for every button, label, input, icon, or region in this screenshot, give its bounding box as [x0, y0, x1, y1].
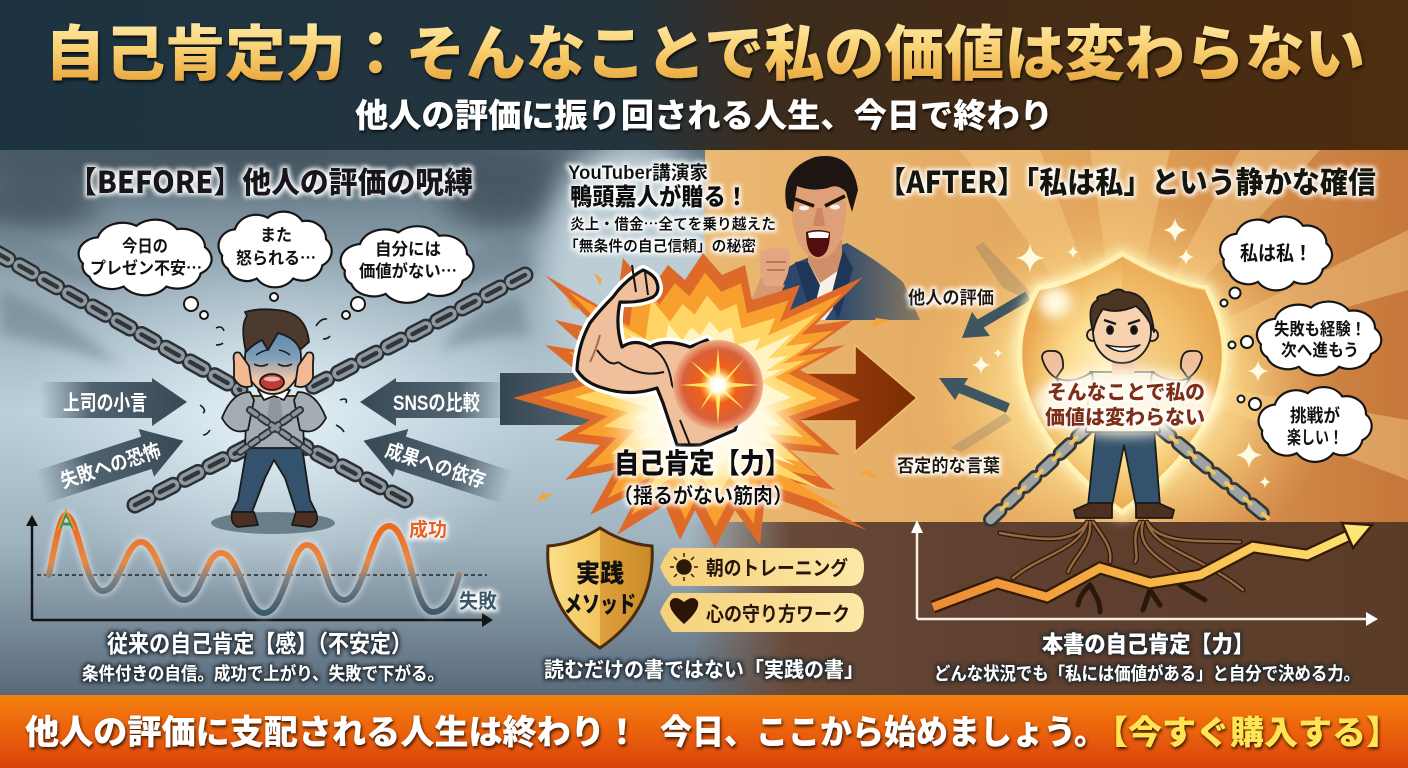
icon: flexed muscular arm — [577, 265, 745, 445]
explosion burst — [513, 253, 890, 548]
chains: broken after — [990, 428, 1268, 520]
arrow: boss's nagging — [40, 378, 187, 426]
thought bubble: presentation anxiety: プレゼン不安… — [90, 254, 202, 279]
label: others' evaluation: 他人の評価 — [908, 284, 994, 310]
thought bubble: challenge is fun: 挑戦が — [1290, 402, 1340, 428]
author caption — [564, 162, 776, 256]
thought bubble: scolded again — [219, 212, 332, 301]
panel: before background — [0, 132, 800, 695]
chart: unstable self-esteem wave — [26, 510, 493, 627]
icon: glowing core — [673, 340, 763, 430]
thought bubble: no worth: 価値がない… — [359, 257, 457, 282]
heading: after: 【AFTER】「私は私」という静かな確信 — [878, 158, 1376, 202]
pill: heart protection work — [660, 593, 864, 632]
thought bubble: no worth: 自分には — [375, 235, 441, 260]
roots — [1000, 522, 1243, 612]
header band — [0, 0, 1408, 150]
heading: this book's self-affirmation power: 本書の自己肯定【力】 — [1042, 625, 1254, 659]
arrow: others' evaluation deflected — [962, 242, 1030, 338]
shield motto — [1033, 368, 1217, 436]
caption: book of practice: 読むだけの書ではない「実践の書」 — [544, 654, 864, 684]
shield motto: 価値は変わらない — [1045, 401, 1205, 430]
author portrait — [738, 156, 920, 320]
shield motto: そんなことで私の — [1047, 376, 1205, 405]
thought bubble: challenge is fun: 楽しい！ — [1287, 424, 1343, 450]
footer call to action — [0, 695, 1408, 768]
label: success: 成功 — [409, 515, 447, 542]
pill: morning training: 朝のトレーニング — [706, 552, 848, 581]
heading: before: 【BEFORE】他人の評価の呪縛 — [68, 158, 473, 202]
icon: heart — [670, 598, 698, 624]
sparkles — [971, 218, 1271, 488]
thought bubble: presentation anxiety: 今日の — [122, 232, 168, 257]
heading: conventional self-esteem: 従来の自己肯定【感】（不安定） — [107, 624, 412, 659]
thought bubble: I am me: 私は私！ — [1240, 237, 1312, 266]
author caption: 「無条件の自己信頼」の秘密 — [564, 235, 756, 256]
pill: heart protection work: 心の守り方ワーク — [706, 598, 850, 627]
glowing shield — [1014, 248, 1230, 520]
badge: practical method shield: メソッド — [564, 585, 636, 619]
thought bubble: failure is experience: 次へ進もう — [1281, 336, 1359, 361]
badge: practical method shield — [548, 528, 652, 648]
arrow: before to after — [500, 345, 917, 452]
arrow: fear of failure: 失敗への恐怖 — [56, 434, 164, 494]
thought bubble: failure is experience — [1228, 302, 1381, 375]
pill: morning training — [660, 548, 864, 586]
arrow: boss's nagging: 上司の小言 — [63, 387, 147, 417]
footer call to action: 他人の評価に支配される人生は終わり！ — [25, 705, 639, 754]
arrow: dependence on results — [356, 417, 516, 511]
thought bubble: failure is experience: 失敗も経験！ — [1274, 315, 1366, 340]
heading: self-affirmation power: 自己肯定【力】 — [614, 442, 790, 482]
subtitle: 他人の評価に振り回される人生、今日で終わり — [355, 89, 1053, 137]
badge: practical method shield: 実践 — [576, 554, 624, 590]
caption: this book's self-affirmation power: どんな状況でも「私には価値がある」と自分で決める力。 — [934, 660, 1360, 686]
buy now button text: 【今すぐ購入する】 — [1094, 706, 1400, 754]
thought bubble: challenge is fun — [1238, 387, 1372, 462]
thought bubble: I am me — [1220, 217, 1332, 306]
label: failure: 失敗 — [459, 585, 497, 614]
chains: before — [0, 252, 525, 505]
title: 自己肯定力：そんなことで私の価値は変わらない — [45, 6, 1365, 93]
figure: confident man — [1042, 289, 1202, 518]
author caption: 炎上・借金…全てを乗り越えた — [570, 213, 776, 234]
arrow: SNS comparison — [360, 378, 510, 426]
author caption: 鴨頭嘉人が贈る！ — [570, 177, 748, 212]
arrow: dependence on results: 成果への依存 — [382, 434, 490, 494]
thought bubble: scolded again: また — [260, 221, 292, 246]
chart: rising self-affirmation — [911, 520, 1378, 626]
caption: conventional self-esteem: 条件付きの自信。成功で上がり、失敗で下がる。 — [82, 660, 444, 686]
arrow: negative words deflected — [939, 378, 1012, 452]
caption: unshakable muscle: （揺るがない筋肉） — [613, 480, 793, 510]
chain across body — [240, 410, 310, 452]
icon: sun — [670, 553, 698, 581]
arrow: fear of failure — [32, 417, 191, 511]
arrow: SNS comparison: SNSの比較 — [393, 392, 480, 415]
figure: distressed man — [200, 309, 346, 534]
thought bubble: presentation anxiety — [79, 220, 212, 319]
footer call to action: 今日、ここから始めましょう。 — [660, 705, 1106, 754]
thought bubble: scolded again: 怒られる… — [236, 244, 316, 269]
thought bubble: no worth — [341, 226, 474, 319]
panel: after background — [690, 150, 1408, 695]
author caption: YouTuber講演家 — [568, 162, 708, 184]
label: negative words: 否定的な言葉 — [897, 452, 1000, 478]
